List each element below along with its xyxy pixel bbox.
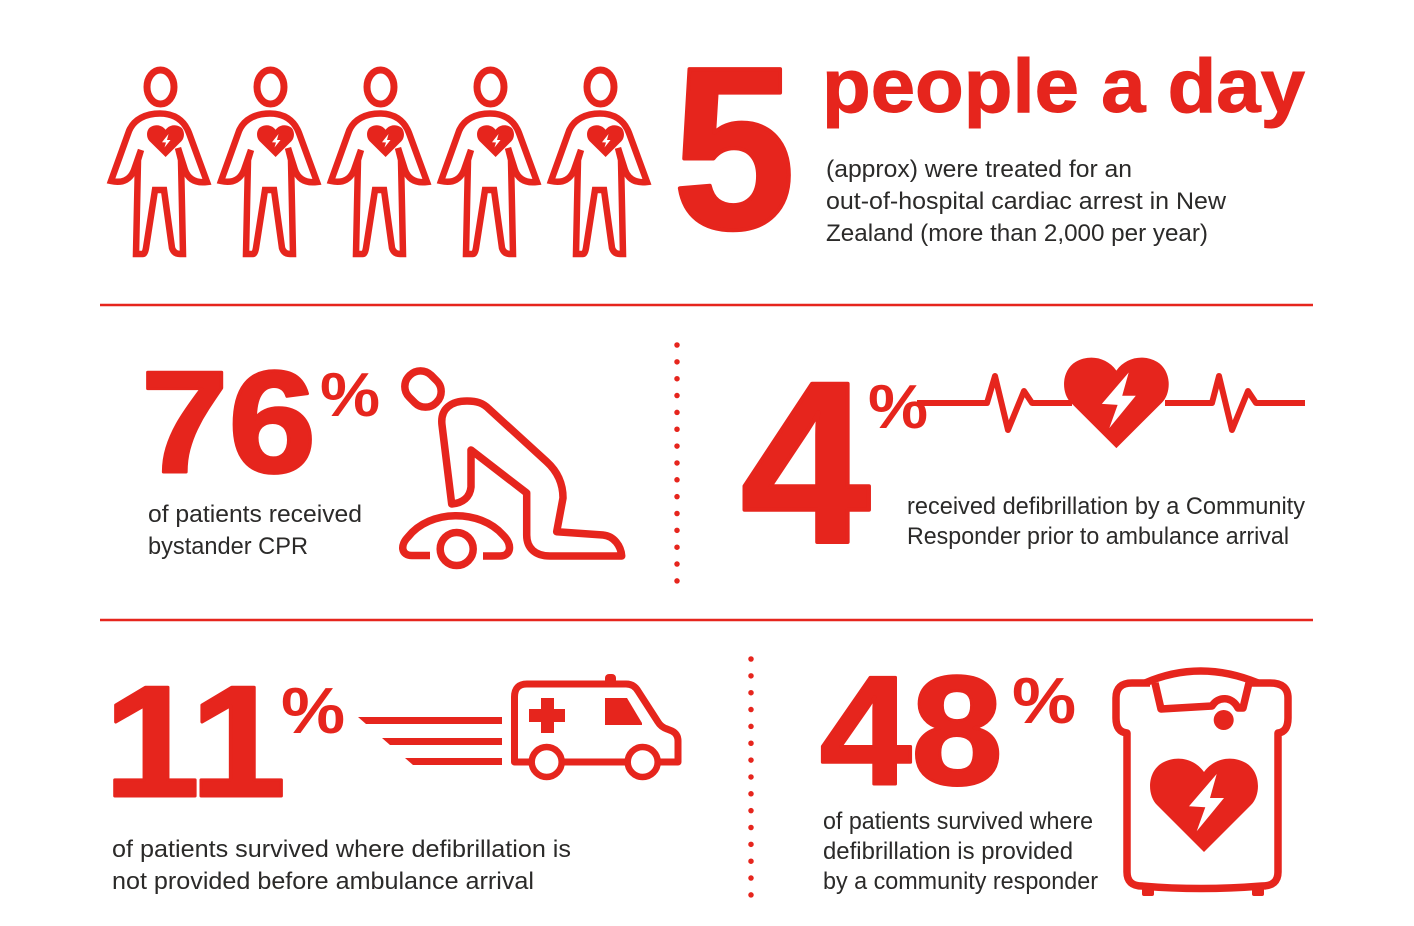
big number 5: 5: [673, 19, 795, 277]
statistic: 4 percent: [741, 334, 928, 591]
text: treated for cardiac arrest: [826, 156, 1227, 247]
icon: heartbeat line with heart: [917, 358, 1305, 448]
statistic: 76 percent: 76: [141, 342, 316, 504]
text: defibrillation by community responder: Responder prior to ambulance arrival: [907, 523, 1289, 550]
statistic: 48 percent: 48: [820, 643, 1003, 817]
panel: bystander CPR: [141, 342, 622, 566]
heading: people a day: people a day: [822, 44, 1305, 129]
icon: speeding ambulance: [358, 674, 678, 777]
statistic: 48 percent: %: [1012, 664, 1076, 737]
statistic: 11 percent: %: [281, 674, 345, 747]
text: survived without defibrillation: of patients survived where defibrillation is: [112, 836, 571, 863]
text: treated for cardiac arrest: Zealand (more than 2,000 per year): [826, 220, 1208, 247]
statistic: 11 percent: 11: [104, 654, 286, 830]
icon: defibrillator device: [1116, 671, 1288, 896]
panel: five people a day: [111, 19, 1305, 277]
statistic: 76 percent: %: [320, 360, 380, 429]
panel: survival with community defibrillation: [820, 643, 1288, 896]
icon: person performing CPR: [399, 365, 622, 566]
text: received bystander CPR: of patients received: [148, 501, 362, 528]
text: treated for cardiac arrest: out-of-hospital cardiac arrest in New: [826, 188, 1227, 215]
text: defibrillation by community responder: [907, 493, 1305, 550]
text: survived without defibrillation: [112, 836, 571, 895]
text: survived without defibrillation: not provided before ambulance arrival: [112, 868, 534, 895]
text: survived with community responder: by a community responder: [823, 868, 1098, 895]
text: survived with community responder: defibrillation is provided: [823, 838, 1073, 865]
text: survived with community responder: of patients survived where: [823, 808, 1093, 835]
statistic: 4 percent: 4: [741, 334, 870, 591]
text: defibrillation by community responder: received defibrillation by a Community: [907, 493, 1305, 520]
panel: survival without defibrillation: [104, 654, 678, 895]
text: survived with community responder: [823, 808, 1098, 895]
text: treated for cardiac arrest: (approx) were treated for an: [826, 156, 1132, 183]
text: received bystander CPR: [148, 501, 362, 560]
panel: community responder defibrillation: [741, 334, 1305, 591]
statistic: 4 percent: %: [868, 372, 928, 441]
text: received bystander CPR: bystander CPR: [148, 533, 308, 560]
icons: five people with heart symbols: [111, 70, 647, 254]
